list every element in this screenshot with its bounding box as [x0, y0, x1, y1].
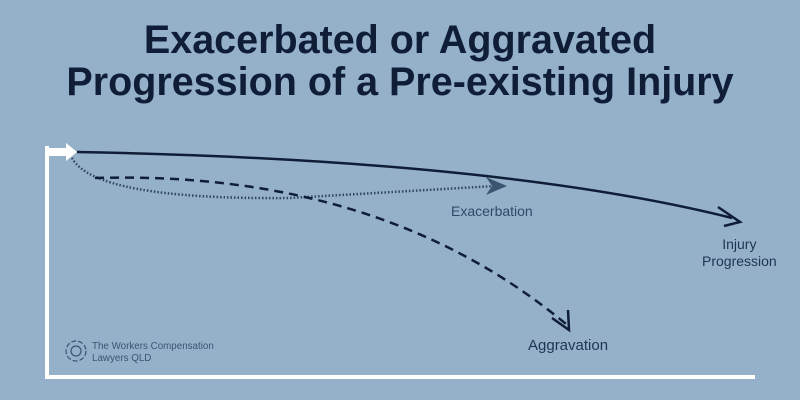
logo icon: [66, 341, 86, 361]
injury progression line: [77, 152, 740, 226]
title: [66, 18, 734, 104]
logo text: Lawyers QLD: [92, 353, 151, 364]
label: injury progression: Injury: [722, 236, 756, 252]
logo text: The Workers Compensation: [92, 341, 214, 352]
exacerbation line: [72, 158, 507, 198]
axes: [47, 143, 755, 377]
title: Exacerbated or Aggravated: [144, 18, 656, 62]
title: Progression of a Pre-existing Injury: [66, 60, 734, 104]
label: injury progression: [702, 236, 777, 269]
logo text: [92, 341, 214, 364]
label: exacerbation: Exacerbation: [451, 203, 533, 219]
aggravation line: [95, 178, 569, 330]
label: injury progression: Progression: [702, 253, 777, 269]
label: aggravation: Aggravation: [528, 337, 608, 354]
